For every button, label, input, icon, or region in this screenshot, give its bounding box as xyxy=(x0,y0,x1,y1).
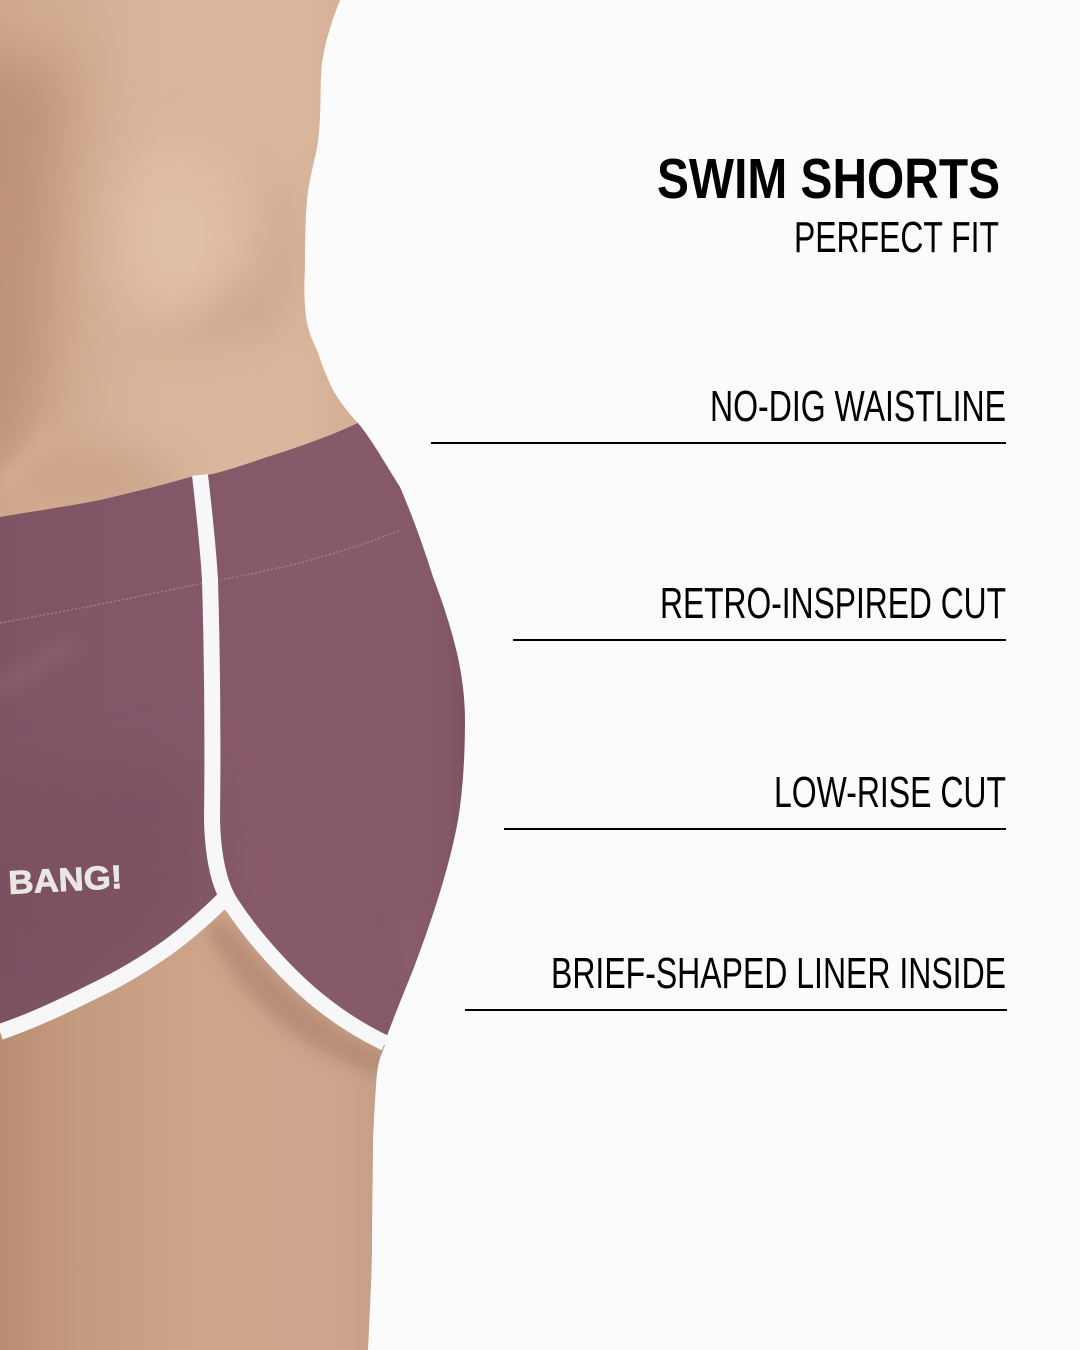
torso xyxy=(0,0,358,517)
photo: torso and leg xyxy=(0,0,400,1350)
swim shorts xyxy=(0,410,480,1060)
title: SWIM SHORTS xyxy=(657,147,1000,211)
shorts body xyxy=(0,410,480,1060)
leg xyxy=(0,880,400,1350)
hem piping xyxy=(0,895,228,1032)
title xyxy=(657,147,1000,262)
logo: BANG! xyxy=(7,858,123,901)
waistband stitching xyxy=(0,530,400,623)
subtitle: PERFECT FIT xyxy=(794,213,999,262)
side piping xyxy=(200,475,385,1043)
